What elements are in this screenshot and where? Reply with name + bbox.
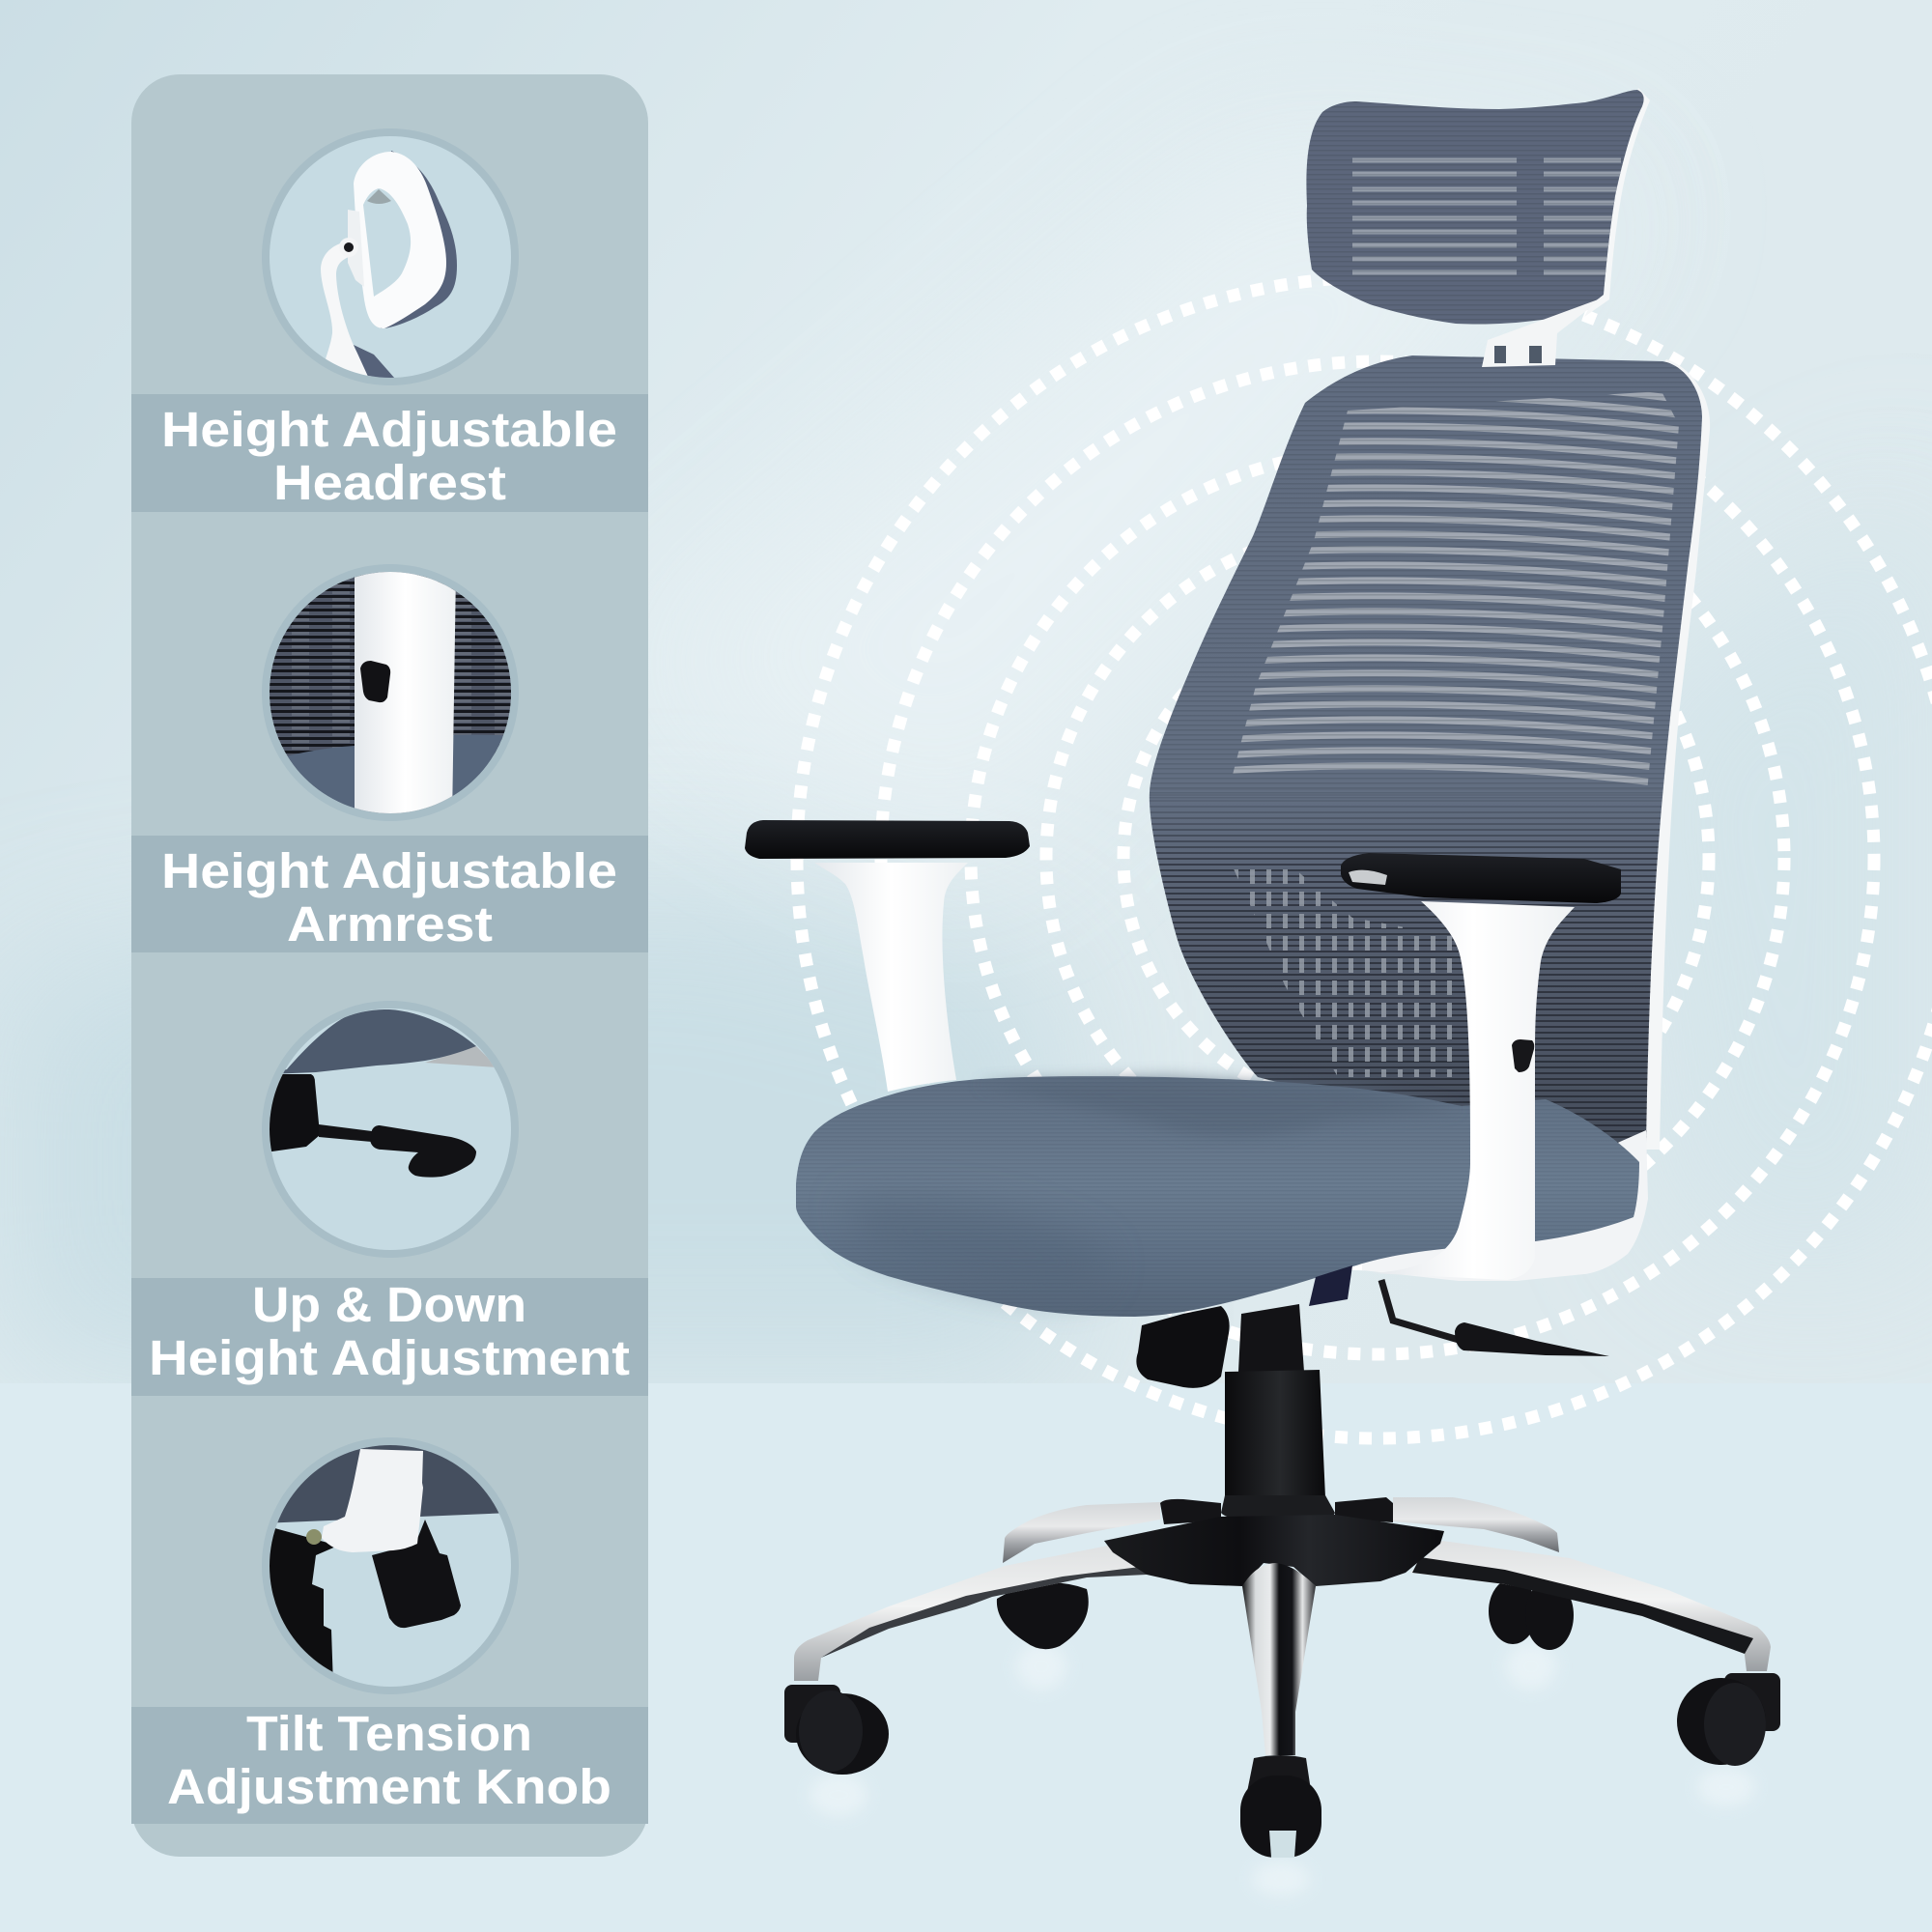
black star hub — [1104, 1515, 1444, 1586]
caster reflections on floor — [810, 1643, 1755, 1896]
right front leg — [1410, 1541, 1771, 1671]
front casters — [784, 1673, 1780, 1858]
left armrest — [745, 820, 1030, 1092]
headrest bracket — [1482, 298, 1604, 367]
right arm support — [1372, 901, 1575, 1280]
front chrome legs — [794, 1541, 1771, 1681]
right armrest — [1341, 853, 1621, 1280]
band: tilt knob label: Adjustment Knob — [167, 1759, 611, 1814]
left front leg — [794, 1546, 1147, 1681]
thumbnail: tilt knob — [261, 1439, 515, 1690]
band: height adjustment label: Up & Down — [252, 1277, 526, 1332]
feature: tilt tension adjustment knob — [131, 1439, 648, 1824]
office chair — [745, 82, 1780, 1896]
concentric dotted rings behind chair — [797, 277, 1932, 1438]
rear chrome legs — [1003, 1497, 1559, 1563]
headrest mesh — [1294, 82, 1662, 333]
band: headrest label: Height Adjustable — [161, 402, 617, 457]
arm adjust button — [1512, 1039, 1534, 1072]
left arm support — [814, 863, 968, 1092]
band: tilt knob label: Tilt Tension — [246, 1706, 532, 1761]
lever rod and paddle — [1381, 1280, 1609, 1356]
left features panel — [131, 74, 648, 1857]
thumbnail: armrest column with button — [261, 568, 522, 821]
feature: height adjustable armrest — [131, 568, 648, 952]
band: headrest label — [131, 394, 648, 512]
band: tilt knob label — [131, 1706, 648, 1824]
gas lift column and mechanism — [1136, 1304, 1335, 1522]
seat cushion — [796, 1076, 1639, 1317]
feature: up and down height adjustment — [131, 1005, 648, 1396]
right arm pad — [1341, 853, 1621, 903]
band: height adjustment label — [131, 1277, 648, 1396]
band: height adjustment label: Height Adjustment — [149, 1330, 630, 1385]
band: armrest label: Height Adjustable — [161, 843, 617, 898]
headrest white trim — [1584, 88, 1650, 317]
seat label tag — [1309, 1265, 1352, 1306]
band: armrest label — [131, 836, 648, 952]
left arm pad — [745, 820, 1030, 859]
thumbnail: headrest side view — [266, 132, 515, 382]
backrest mesh — [1140, 348, 1719, 1159]
band: headrest label: Headrest — [273, 455, 506, 510]
rear casters — [997, 1578, 1574, 1650]
thumbnail: height lever — [266, 1005, 515, 1254]
backrest white frame edge — [1642, 359, 1710, 1150]
feature: height adjustable headrest — [131, 132, 648, 512]
band: armrest label: Armrest — [287, 896, 493, 952]
panel background — [131, 74, 648, 1857]
front center chrome leg — [1242, 1563, 1316, 1755]
white seat pan — [1362, 1130, 1648, 1281]
